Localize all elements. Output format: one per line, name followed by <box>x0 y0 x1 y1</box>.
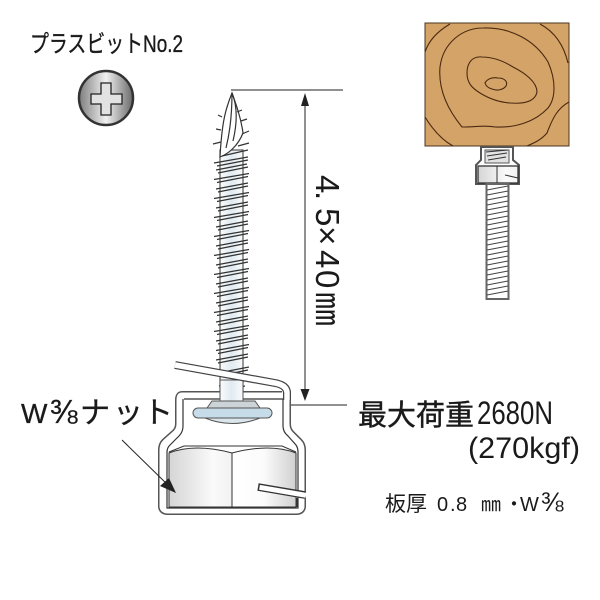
label: max load kgf: (270kgf) <box>468 432 580 465</box>
label: plate thickness: 板厚 <box>385 493 427 516</box>
dimension label: 4 <box>309 175 346 193</box>
screw tip <box>213 93 249 157</box>
screw threads <box>214 157 249 391</box>
screw inside clip <box>220 380 243 401</box>
label: Phillips bit No.2: プラスビットNo.2 <box>30 31 183 58</box>
label: nut size: ⅜ <box>50 393 78 430</box>
label: plate thickness: ㎜ <box>481 494 501 516</box>
threaded bolt <box>486 184 508 299</box>
dimension label: 4 <box>309 250 346 268</box>
label: plate thickness: 0 <box>437 494 448 516</box>
label: plate thickness: ・ <box>504 494 524 516</box>
dimension label: 0 <box>309 270 346 288</box>
wood block <box>425 23 569 146</box>
small clip nut <box>476 147 519 184</box>
label: nut size: W <box>21 398 48 429</box>
label: plate thickness: ⅜ <box>541 487 564 517</box>
label: nut size: ト <box>143 397 173 430</box>
clip nut assembly <box>162 365 306 511</box>
screw <box>213 93 249 400</box>
label: nut size: ナ <box>80 397 110 430</box>
label: nut size: ッ <box>113 397 143 430</box>
dimension label: 5 <box>309 208 346 226</box>
washer <box>193 401 272 424</box>
label: max load: 最大荷重 <box>358 399 474 432</box>
dimension label: . <box>309 191 346 200</box>
lower clip tab <box>258 487 305 495</box>
wood mounting illustration <box>425 23 569 299</box>
arrow: nut pointer <box>122 440 176 493</box>
label: max load: 2680N <box>477 395 553 431</box>
label: plate thickness: W <box>520 494 539 516</box>
top clip tab <box>175 365 287 400</box>
label: max load <box>358 395 553 432</box>
screw shaft <box>220 150 243 400</box>
dimension lines <box>231 90 347 405</box>
clip body <box>162 392 302 511</box>
label: plate thickness: . <box>450 494 456 516</box>
dimension label: ㎜ <box>308 292 346 326</box>
label: plate thickness: 8 <box>456 494 467 516</box>
dimension label: × <box>309 226 346 245</box>
hex nut <box>169 446 296 507</box>
icon: Phillips screw head <box>79 71 133 125</box>
